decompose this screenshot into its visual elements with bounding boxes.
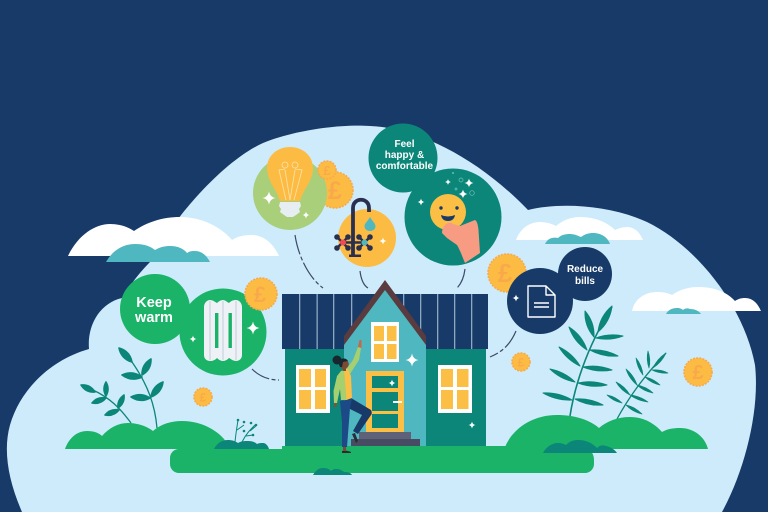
coin by bulb (317, 172, 353, 208)
right window (438, 365, 472, 413)
steps (351, 432, 420, 446)
small coin (318, 161, 336, 179)
coin near document: £ (518, 356, 525, 370)
white cloud left (68, 217, 279, 256)
bent leg (345, 398, 372, 434)
reduce bills bubble: Reduce (567, 264, 603, 275)
house (282, 280, 488, 446)
radiator circle (180, 288, 266, 376)
coin right (684, 358, 712, 386)
left hills (65, 421, 231, 449)
white cloud right (632, 287, 761, 311)
reduce bills bubble (558, 247, 612, 301)
gable (344, 288, 426, 446)
door (366, 371, 404, 432)
hand (358, 340, 362, 348)
hand (442, 220, 480, 263)
teal cloud left (106, 244, 210, 262)
feel happy bubble: comfortable (376, 161, 434, 172)
roof panels (282, 294, 488, 349)
bulb icon circle (253, 147, 327, 230)
sparkles (418, 178, 474, 206)
ground (170, 446, 594, 473)
feel happy bubble (368, 124, 438, 192)
coin behind document: £ (498, 258, 513, 288)
person (332, 340, 372, 453)
standing leg (340, 399, 352, 447)
sparkles on house (388, 354, 476, 428)
teal cloud top right (545, 233, 610, 244)
ankle (343, 447, 346, 451)
coin lower left (194, 388, 212, 406)
teal bush right (543, 440, 617, 453)
coin top left of house (245, 278, 277, 310)
gable roof trim (344, 280, 426, 345)
large pale blue cloud (7, 126, 756, 512)
coin near document (512, 353, 530, 371)
small teal bush left with sprig (214, 419, 269, 449)
walls (285, 349, 486, 446)
coin right: £ (692, 362, 704, 384)
left plants (81, 348, 163, 428)
left window (296, 365, 330, 413)
radiator (204, 300, 242, 361)
upper window (371, 322, 399, 362)
coin lower left: £ (200, 390, 207, 404)
lower arm and hand (334, 402, 337, 407)
coin by bulb: £ (328, 177, 342, 205)
keep warm bubble: warm (134, 310, 173, 326)
coin behind document (488, 254, 526, 292)
teal cloud right (666, 308, 701, 314)
feel happy bubble: Feel (394, 139, 415, 150)
white cloud top right (516, 217, 643, 240)
keep warm bubble (120, 274, 190, 344)
raised arm (345, 347, 361, 374)
tap icon circle (334, 200, 396, 267)
reduce bills bubble: bills (575, 276, 595, 287)
head and bun (332, 356, 342, 364)
keep warm bubble: Keep (136, 295, 172, 311)
small teal bush under ground (313, 468, 352, 475)
smiley circle (404, 168, 502, 266)
smiley face (430, 194, 466, 230)
shoes (342, 433, 358, 453)
document circle (507, 268, 573, 334)
dashed connector lines (252, 235, 516, 380)
right plants (543, 306, 668, 419)
feel happy bubble: happy & (385, 150, 424, 161)
torso (334, 370, 347, 403)
coin top left of house: £ (254, 282, 267, 307)
small coin: £ (323, 163, 331, 178)
right hills (505, 415, 708, 449)
